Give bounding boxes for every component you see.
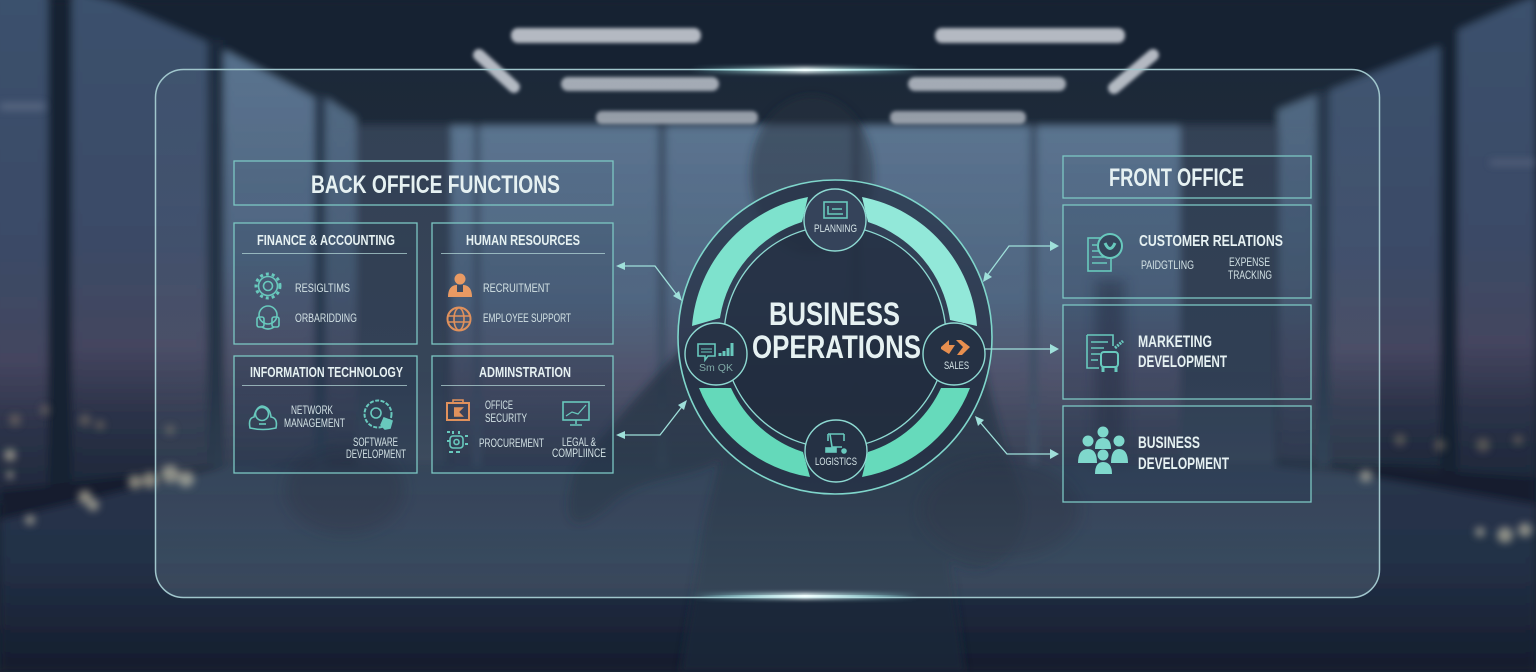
- icon: team people: [1078, 426, 1128, 474]
- heading: front office: FRONT OFFICE: [1109, 164, 1244, 192]
- icon: software globe and shield: [364, 400, 392, 429]
- card: information technology: MANAGEMENT: [284, 416, 345, 430]
- card: customer relations: EXPENSE: [1229, 255, 1270, 269]
- icon: monitor chart: [563, 402, 589, 425]
- card: customer relations: [1063, 205, 1311, 298]
- icon: briefcase: [447, 400, 469, 420]
- card: marketing development: DEVELOPMENT: [1138, 352, 1227, 371]
- card: human resources: RECRUITMENT: [483, 281, 551, 295]
- person silhouette: [568, 95, 1025, 672]
- node: logistics: [805, 420, 867, 482]
- card: administration: [432, 356, 613, 473]
- card: finance and accounting: [234, 223, 417, 344]
- icon: network cloud person: [250, 406, 276, 430]
- arrow: human resources to ring: [616, 262, 682, 301]
- glass panel: [156, 67, 1380, 598]
- arrow: ring to business development: [975, 416, 1059, 459]
- icon: marketing document: [1087, 335, 1123, 372]
- card: human resources: [432, 223, 613, 344]
- city bokeh lights: [0, 103, 1536, 543]
- node: analytics: [685, 323, 747, 385]
- node: planning: [804, 189, 866, 251]
- card: administration: OFFICE: [485, 398, 513, 412]
- title: business operations: [752, 296, 921, 365]
- card: business development: [1063, 406, 1311, 502]
- icon: planning board: [824, 202, 847, 218]
- card: information technology: INFORMATION TECHNOLOGY: [250, 364, 403, 381]
- icon: gear: [256, 274, 280, 298]
- panel: front office: [1063, 156, 1311, 502]
- icon: chat and bar chart: [698, 343, 732, 360]
- card: information technology: SOFTWARE: [353, 435, 398, 449]
- ring segments: [692, 197, 977, 477]
- card: administration: LEGAL &: [562, 435, 596, 449]
- heading: back office functions: BACK OFFICE FUNCTIONS: [311, 171, 560, 199]
- node: sales: [923, 323, 985, 385]
- card: information technology: [234, 356, 417, 473]
- title: business operations: BUSINESS: [769, 296, 900, 332]
- heading: front office: [1063, 156, 1311, 198]
- card: business development: DEVELOPMENT: [1138, 454, 1229, 473]
- title: business operations: OPERATIONS: [752, 329, 921, 365]
- node: sales: SALES: [944, 360, 969, 372]
- icon: sales arrows: [941, 340, 970, 355]
- card: finance and accounting: FINANCE & ACCOUNTING: [257, 232, 395, 249]
- card: business development: BUSINESS: [1138, 433, 1200, 452]
- icon: recruit person: [448, 274, 472, 297]
- node: logistics: LOGISTICS: [815, 456, 857, 468]
- card: human resources: EMPLOYEE SUPPORT: [483, 311, 571, 325]
- icon: procurement chip: [447, 431, 468, 452]
- card: marketing development: [1063, 305, 1311, 399]
- card: customer relations: CUSTOMER RELATIONS: [1139, 233, 1283, 250]
- icon: document with badge: [1088, 234, 1122, 271]
- node: planning: PLANNING: [814, 223, 857, 235]
- card: finance and accounting: RESIGLTIMS: [295, 281, 350, 295]
- arrow: administration to ring: [616, 400, 687, 439]
- icon: headset person: [257, 306, 279, 329]
- heading: back office functions: [234, 161, 613, 205]
- node: analytics: Sm QK: [699, 363, 733, 374]
- card: information technology: NETWORK: [291, 403, 333, 417]
- card: administration: ADMINSTRATION: [479, 364, 571, 381]
- card: human resources: HUMAN RESOURCES: [466, 232, 580, 249]
- panel: back office functions: [234, 161, 613, 473]
- icon: logistics cart: [826, 434, 846, 453]
- card: administration: COMPLIINCE: [552, 446, 606, 460]
- card: customer relations: TRACKING: [1228, 268, 1272, 282]
- card: administration: PROCUREMENT: [479, 436, 544, 450]
- card: finance and accounting: ORBARIDDING: [295, 311, 357, 325]
- arrow: sales to marketing: [985, 344, 1059, 354]
- bottom glow flare: [690, 593, 920, 599]
- arrow: ring to customer relations: [983, 241, 1059, 282]
- card: information technology: DEVELOPMENT: [346, 447, 406, 461]
- icon: globe: [448, 308, 470, 330]
- top glow flare: [690, 67, 920, 73]
- outer and inner discs: [678, 180, 992, 494]
- card: customer relations: PAIDGTLING: [1141, 258, 1194, 272]
- card: marketing development: MARKETING: [1138, 332, 1212, 351]
- ceiling light bars: [479, 28, 1153, 124]
- diagram: business operations ring: [678, 180, 992, 494]
- card: administration: SECURITY: [485, 411, 527, 425]
